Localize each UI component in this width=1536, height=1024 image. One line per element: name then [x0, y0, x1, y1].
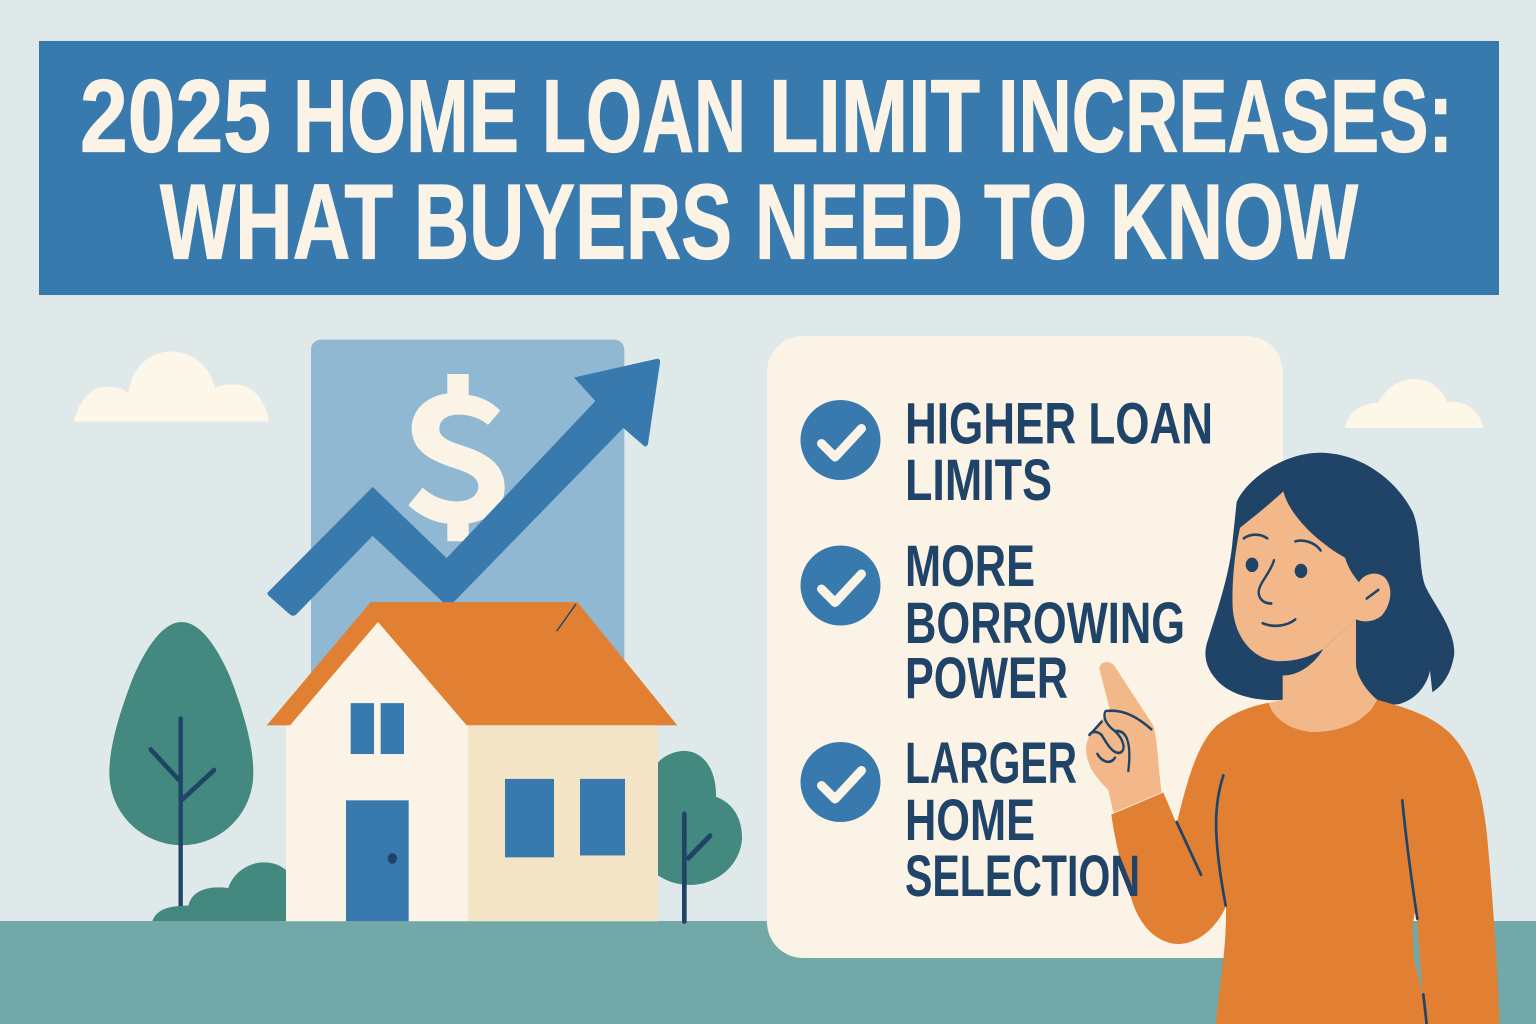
chart background panel — [311, 340, 624, 722]
hair — [1205, 453, 1454, 710]
benefit 3 text — [905, 731, 1140, 909]
benefit 3 — [800, 731, 1140, 909]
cloud left — [74, 351, 269, 422]
benefit 3 text: SELECTION — [905, 844, 1140, 909]
title line 2: NEED — [755, 162, 963, 282]
panel: benefits card — [767, 336, 1283, 958]
benefit 1 text — [905, 392, 1213, 513]
hand — [1086, 662, 1162, 813]
ground — [0, 921, 1536, 1024]
tree left — [109, 622, 253, 906]
house right wall — [468, 725, 658, 921]
cloud right — [1345, 379, 1483, 428]
benefit 1 — [800, 392, 1213, 513]
title line 1: LOAN — [542, 58, 746, 174]
house roof — [267, 602, 677, 725]
benefit 2 text: MORE — [905, 534, 1035, 599]
house and growth chart illustration — [267, 340, 677, 921]
title line 2: WHAT — [160, 162, 393, 282]
title line 2 — [160, 162, 1358, 282]
benefit 2 text: POWER — [905, 646, 1068, 711]
title line 2: BUYERS — [414, 162, 732, 282]
icon: check — [800, 400, 880, 480]
lower windows — [505, 779, 625, 857]
arrow: upward growth — [267, 359, 660, 616]
title line 1: HOME — [293, 58, 519, 174]
title line 2: KNOW — [1110, 162, 1358, 282]
woman pointing — [1086, 453, 1499, 1024]
benefit 2 — [800, 534, 1185, 711]
bush — [152, 862, 286, 921]
benefit 2 text: BORROWING — [905, 591, 1185, 656]
sweater fold lines — [1177, 775, 1427, 1024]
title line 1 — [80, 58, 1453, 174]
title line 1: LIMIT — [769, 58, 980, 174]
icon: check — [800, 742, 880, 822]
upper window — [351, 703, 404, 754]
benefit 1 text: LIMITS — [905, 448, 1052, 513]
gap under right arm — [1413, 910, 1422, 993]
door — [346, 800, 409, 921]
benefit 2 text — [905, 534, 1185, 711]
sweater — [1111, 700, 1499, 1024]
facial features — [1244, 535, 1378, 626]
benefit 1 text: HIGHER LOAN — [905, 392, 1213, 456]
title line 2: TO — [984, 162, 1087, 282]
tree right — [658, 751, 742, 921]
neck — [1269, 619, 1377, 732]
title banner — [39, 41, 1499, 295]
benefit 3 text: LARGER — [905, 731, 1077, 796]
benefit 3 text: HOME — [905, 788, 1035, 853]
title line 1: 2025 — [80, 58, 271, 174]
icon: check — [800, 546, 880, 626]
icon: dollar sign — [408, 374, 505, 541]
face — [1232, 491, 1390, 661]
house front wall — [286, 622, 468, 921]
